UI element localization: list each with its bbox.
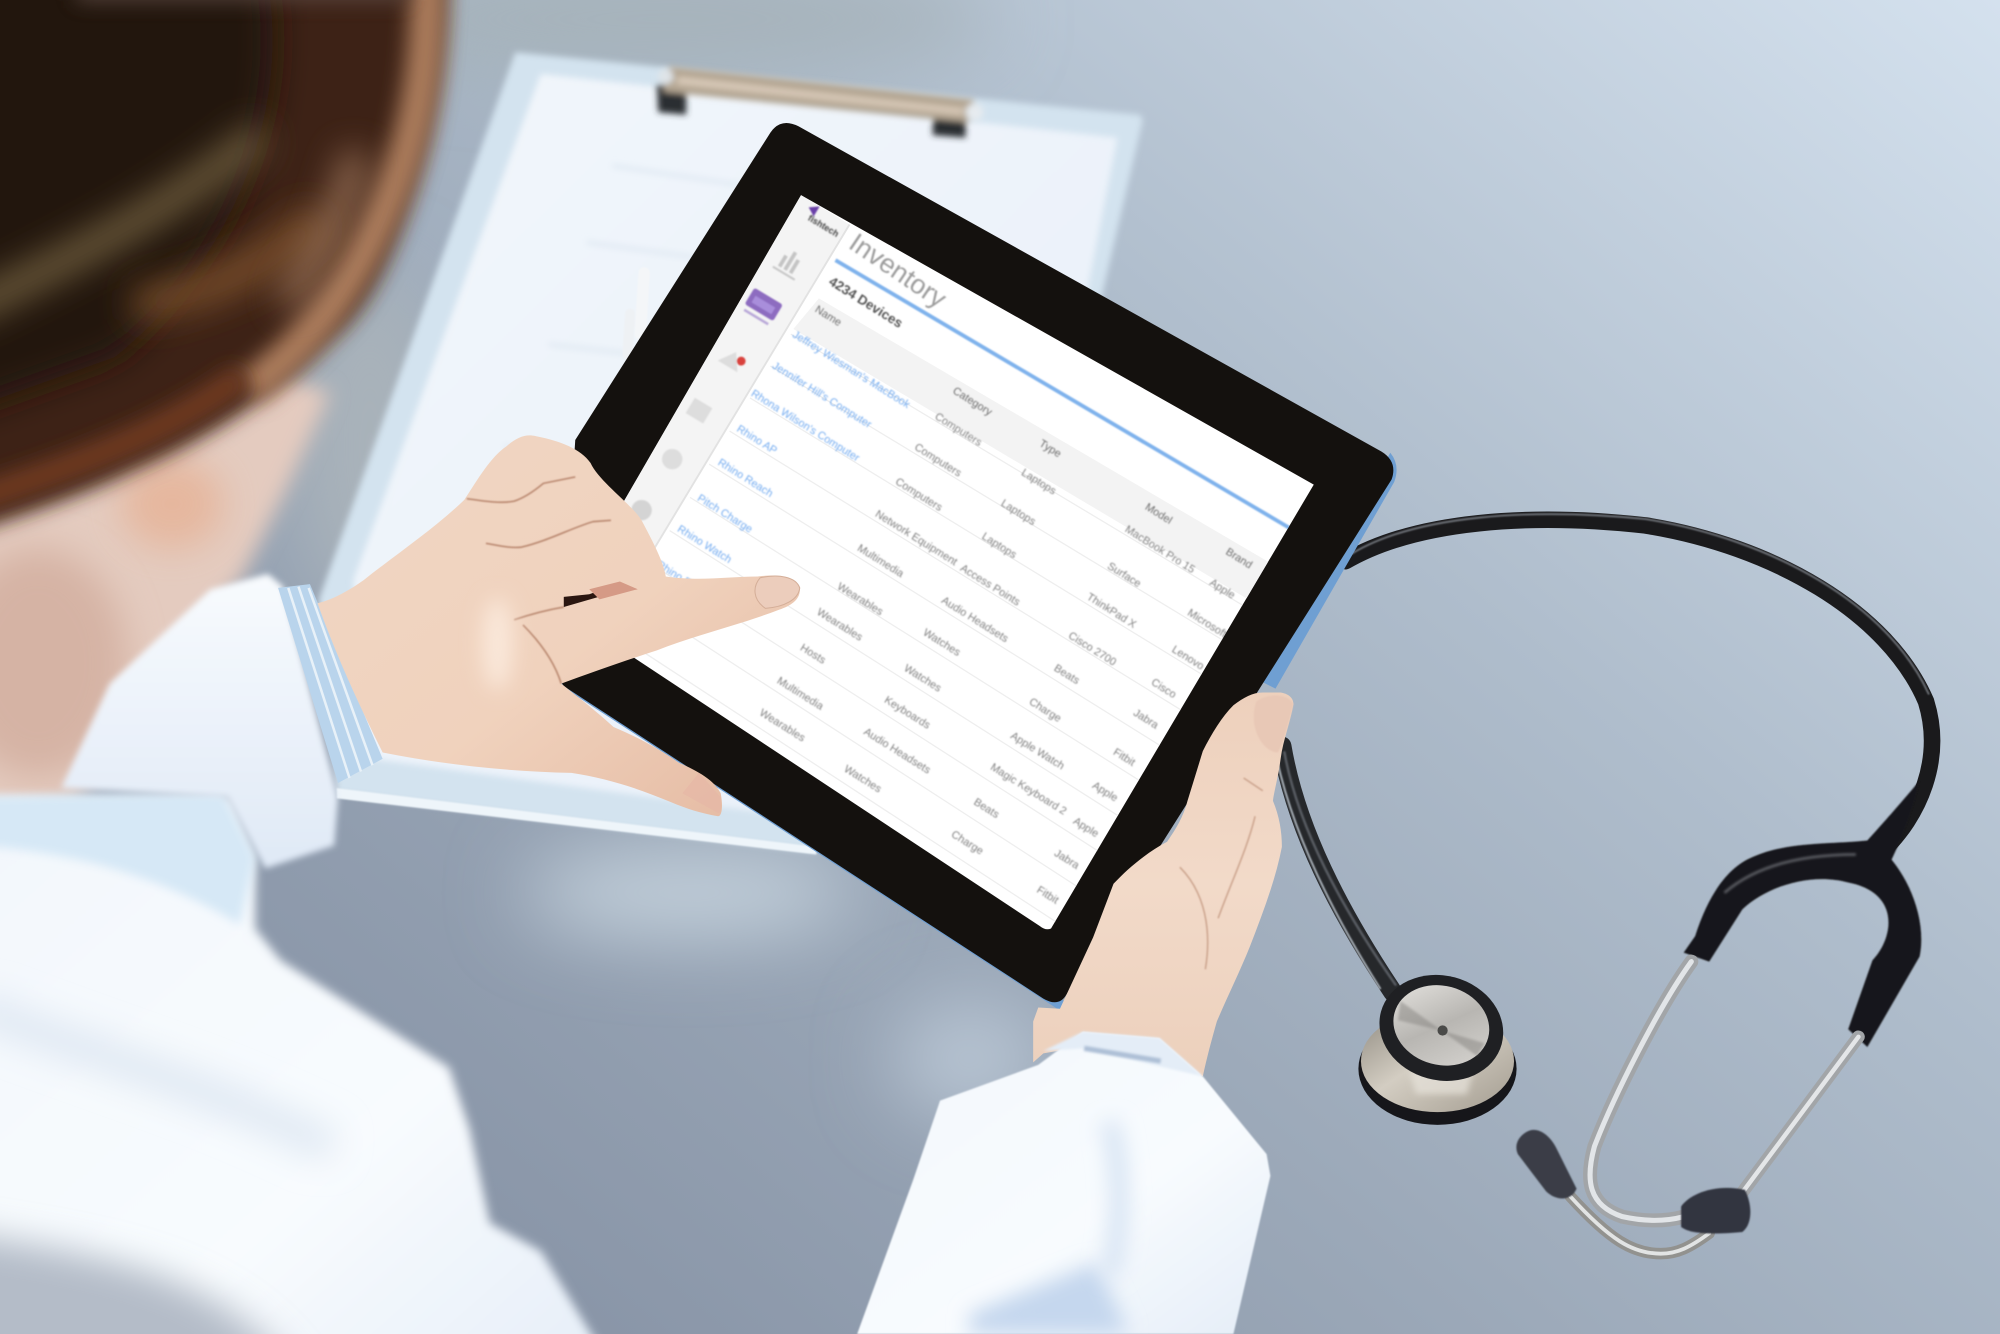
left hand pointing xyxy=(318,435,800,816)
heading: Inventory: Inventory xyxy=(844,227,952,314)
thumb nail xyxy=(682,773,721,813)
table text: Microsoft xyxy=(1185,607,1229,640)
tablet blue edge xyxy=(1263,453,1397,689)
sidebar icon: alerts xyxy=(718,352,747,372)
coat sleeve xyxy=(61,574,338,869)
table text xyxy=(654,227,1254,907)
tablet xyxy=(548,123,1429,1047)
thumbnail xyxy=(1254,695,1293,752)
table text: Apple xyxy=(1071,815,1101,840)
brand column: Apple xyxy=(1207,577,1237,602)
name column: Jeffrey Wiesman's MacBook xyxy=(790,329,912,411)
clipboard with paper xyxy=(319,52,1142,854)
chest piece xyxy=(1358,961,1517,1125)
table text: Jabra xyxy=(1052,847,1082,872)
tube xyxy=(1276,514,1932,992)
sidebar icon: dashboard xyxy=(772,251,800,281)
type column: Laptops xyxy=(1019,467,1059,498)
table text: Watches xyxy=(921,627,963,659)
table text: Beats xyxy=(971,796,1002,821)
sidebar icon: inventory active xyxy=(741,288,783,327)
column headers xyxy=(813,304,1254,571)
table text: Cisco xyxy=(1149,676,1178,701)
table text: ThinkPad X xyxy=(1084,591,1138,631)
sidebar icon: reports xyxy=(686,398,712,424)
table text: Laptops xyxy=(980,531,1019,561)
yoke xyxy=(1684,781,1921,1047)
table text: Apple Watch xyxy=(1008,730,1066,772)
table text: Multimedia xyxy=(855,542,907,581)
table text: Multimedia xyxy=(775,675,826,713)
woman's neck xyxy=(0,370,330,829)
right hand holding tablet xyxy=(1033,693,1293,1076)
sidebar logo: fishtech xyxy=(806,213,841,239)
category column: Computers xyxy=(933,411,984,449)
table text: Computers xyxy=(893,476,945,514)
stethoscope xyxy=(1276,514,1932,1254)
pens on clipboard xyxy=(628,273,644,355)
table text: Watches xyxy=(902,662,944,695)
fingernail index xyxy=(755,576,800,608)
woman's hair xyxy=(0,0,447,542)
column headers: Model xyxy=(1143,501,1174,527)
earpieces xyxy=(1516,1130,1577,1199)
clipboard clip xyxy=(657,66,983,138)
name column: Rhino Watch xyxy=(675,523,734,566)
row lines xyxy=(646,334,1243,922)
finger gap shadow xyxy=(564,584,625,607)
wrist highlight xyxy=(482,598,513,690)
shirt cuff xyxy=(278,584,383,783)
column headers: Name xyxy=(813,304,844,329)
table header band xyxy=(793,298,1293,610)
table text: Lenovo xyxy=(1170,644,1206,673)
sidebar xyxy=(624,195,850,548)
name column: Jennifer Hill's Computer xyxy=(770,360,874,431)
doctor's white coat body xyxy=(0,574,625,1334)
sleeve shadow xyxy=(969,1263,1129,1334)
table text: Fitbit xyxy=(1111,746,1137,769)
name column: Rhino Reach xyxy=(715,457,775,500)
table text: Watches xyxy=(842,763,884,796)
sidebar icon: shield xyxy=(662,449,682,470)
tablet bezel xyxy=(559,123,1393,1002)
table text: Wearables xyxy=(757,707,808,745)
name column: Rhino Reach xyxy=(654,559,714,602)
table text: Audio Headsets xyxy=(861,726,933,777)
coat shadows xyxy=(0,1231,306,1334)
name column xyxy=(661,330,910,579)
table text: Laptops xyxy=(999,497,1038,528)
table text: Wearables xyxy=(835,581,886,618)
blue rule xyxy=(835,260,1290,528)
table text: Surface xyxy=(1105,560,1143,590)
name column: Rhona Wilson's Computer xyxy=(749,388,862,464)
sidebar icon: settings xyxy=(632,500,652,520)
silver ear tubes xyxy=(1570,962,1858,1254)
table text: Fitbit xyxy=(1034,884,1061,907)
table text: Beats xyxy=(1052,662,1082,687)
tablet screen xyxy=(624,195,1314,930)
table text: Apple xyxy=(1090,780,1120,804)
table text: Wearables xyxy=(815,606,865,644)
table text: Keyboards xyxy=(882,694,933,732)
table text: Charge xyxy=(949,829,985,858)
coat collar xyxy=(0,793,255,925)
table text: Audio Headsets xyxy=(939,594,1011,645)
column headers: Brand xyxy=(1223,546,1254,571)
table text: Access Points xyxy=(958,562,1023,609)
table text: Magic Keyboard 2 xyxy=(988,761,1069,818)
column headers: Category xyxy=(950,385,995,419)
model column: MacBook Pro 15 xyxy=(1123,523,1197,576)
table text: Cisco 2700 xyxy=(1066,630,1118,669)
table text: Hosts xyxy=(798,642,828,667)
name column: Pitch Charge xyxy=(695,492,755,536)
device count: 4234 Devices xyxy=(826,274,906,331)
fingers detail xyxy=(467,477,611,684)
table text: Computers xyxy=(912,441,964,480)
table text: Jabra xyxy=(1131,707,1161,732)
table text: Charge xyxy=(1027,696,1063,725)
name column: Rhino AP xyxy=(734,423,779,457)
table text: Network Equipment xyxy=(873,508,959,568)
column headers: Type xyxy=(1037,438,1063,460)
cuff stripe xyxy=(1043,1032,1203,1076)
right coat sleeve xyxy=(857,1032,1270,1334)
